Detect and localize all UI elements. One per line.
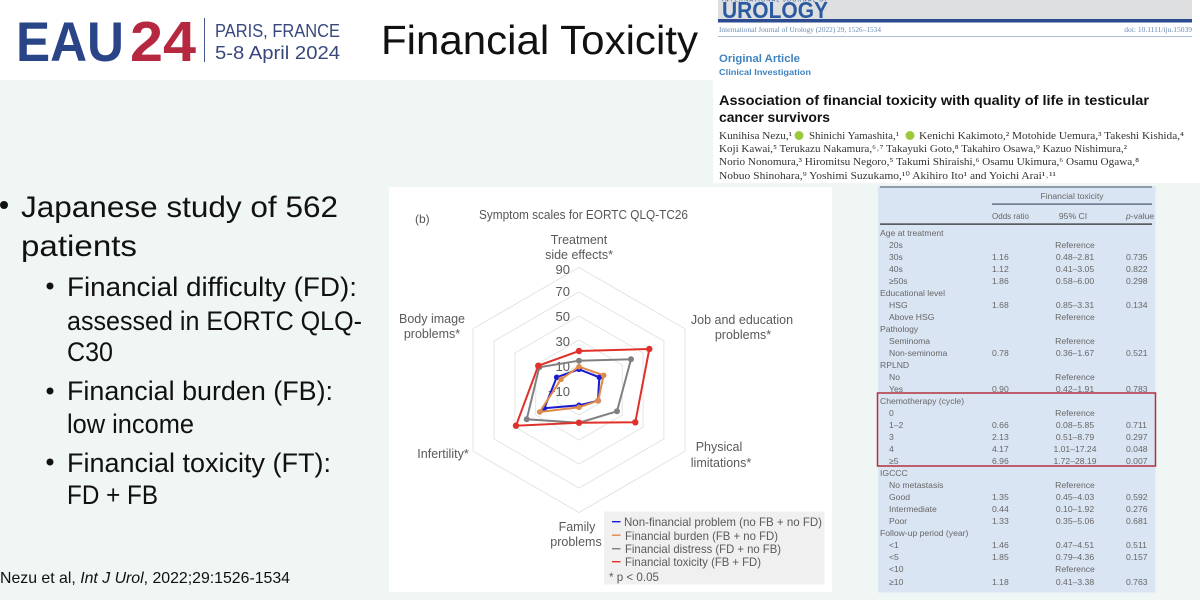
table rows: chemotherapy: 6.96 [992, 456, 1009, 466]
table rows: chemotherapy: 1.01–17.24 [1053, 444, 1097, 454]
series: non-financial problem [542, 366, 602, 411]
table rows: RPLND: 0.42–1.91 [1056, 384, 1094, 394]
table rows: IGCCC: 0.35–5.06 [1056, 516, 1094, 526]
table rows: IGCCC: Reference [1055, 480, 1095, 490]
radar axis labels: Treatment [551, 233, 608, 247]
table rows: chemotherapy: 1–2 [889, 420, 904, 430]
radar grid [473, 268, 685, 512]
table rows: follow-up period: Reference [1055, 564, 1095, 574]
bullet: financial burden [46, 376, 333, 439]
citation: Nezu et al, Int J Urol, 2022;29:1526-1534 [0, 570, 290, 587]
panel: journal article header: Original Article [719, 53, 800, 65]
panel: journal article header: Clinical Investigation [719, 67, 811, 77]
table rows: age at treatment: 0.58–6.00 [1056, 276, 1094, 286]
EAU24 logo: 24 [130, 10, 196, 74]
table rows: age at treatment: 0.41–3.05 [1056, 264, 1094, 274]
table rows: educational level: 0.85–3.31 [1056, 300, 1094, 310]
table header: 95% CI [1059, 211, 1087, 221]
panel: journal article header: cancer survivors [719, 110, 830, 125]
table rows: age at treatment: 1.86 [992, 276, 1009, 286]
table rows: IGCCC: 0.276 [1126, 504, 1148, 514]
table rows: follow-up period: 0.763 [1126, 577, 1148, 587]
table rows: IGCCC [880, 468, 1148, 526]
table header [992, 191, 1154, 221]
panel: journal article header: Norio Nonomura,³ Hiromitsu Negoro,⁵ Takumi Shiraishi,⁶ Osamu Ukimura,⁶ Osamu Ogawa,⁸ [719, 157, 1139, 168]
table rows: IGCCC: 1.35 [992, 492, 1009, 502]
table rows: age at treatment [880, 228, 1148, 286]
panel: journal article header: Koji Kawai,⁵ Terukazu Nakamura,⁶˒⁷ Takayuki Goto,⁸ Takahiro Osawa,⁹ Kazuo Nishimura,² [719, 144, 1127, 155]
table rows: age at treatment: Age at treatment [880, 228, 944, 238]
radar axis labels: Infertility* [417, 447, 469, 461]
table rows: follow-up period: 1.18 [992, 577, 1009, 587]
series: financial burden [537, 364, 606, 415]
table rows: IGCCC: 0.592 [1126, 492, 1148, 502]
radar scale numbers: 50 [556, 309, 570, 324]
table rows: RPLND: Yes [889, 384, 903, 394]
table rows: follow-up period: 0.511 [1126, 540, 1147, 550]
table rows: pathology: Non-seminoma [889, 348, 947, 358]
panel: journal article header: Kenichi Kakimoto,² Motohide Uemura,³ Takeshi Kishida,⁴ [919, 131, 1184, 142]
table rows: chemotherapy: 0.711 [1126, 420, 1147, 430]
radar axis labels: side effects* [545, 248, 613, 262]
table rows: age at treatment: 0.298 [1126, 276, 1148, 286]
bullet: study size [0, 191, 338, 263]
bullet: financial difficulty [46, 272, 362, 367]
table rows: age at treatment: 30s [889, 252, 903, 262]
table rows: chemotherapy: 0.51–8.79 [1056, 432, 1094, 442]
table rows: chemotherapy: 1.72–28.19 [1053, 456, 1097, 466]
table rows: IGCCC: 0.681 [1126, 516, 1148, 526]
radar scale numbers: 30 [556, 334, 570, 349]
panel: journal article header: Kunihisa Nezu,¹ [719, 131, 792, 142]
table rows: IGCCC: No metastasis [889, 480, 943, 490]
radar scale numbers: 10 [556, 359, 570, 374]
bullet list [0, 191, 362, 510]
table rows: follow-up period: 0.41–3.38 [1056, 577, 1094, 587]
panel: journal article header: Association of financial toxicity with quality of life in testicular [719, 93, 1150, 108]
table rows: pathology: Reference [1055, 336, 1095, 346]
bullet: financial toxicity: Financial toxicity (FT): [67, 448, 331, 478]
table rows: IGCCC: 1.33 [992, 516, 1009, 526]
radar axis labels: Family [559, 520, 596, 534]
radar axis labels: limitations* [691, 456, 751, 470]
table rows: pathology: 0.521 [1126, 348, 1148, 358]
bullet: financial difficulty: C30 [67, 337, 113, 367]
bullet: financial difficulty: assessed in EORTC QLQ- [67, 306, 362, 336]
radar scale numbers: 70 [556, 284, 570, 299]
panel: radar chart [389, 187, 832, 592]
table rows: follow-up period: Follow-up period (year) [880, 528, 968, 538]
radar axis labels: Job and education [691, 313, 793, 327]
table rows: follow-up period [880, 528, 1148, 587]
bullet: study size: patients [21, 230, 137, 263]
table rows: educational level: 0.134 [1126, 300, 1148, 310]
table rows: pathology: Seminoma [889, 336, 930, 346]
table rows: follow-up period: 0.157 [1126, 552, 1148, 562]
table rows: chemotherapy: 0.007 [1126, 456, 1148, 466]
table rows: age at treatment: Reference [1055, 240, 1095, 250]
radar scale numbers: −10 [548, 384, 570, 399]
table header: Odds ratio [992, 211, 1029, 221]
table rows: pathology: 0.36–1.67 [1056, 348, 1094, 358]
table rows: age at treatment: 0.822 [1126, 264, 1148, 274]
radar axis labels: problems [550, 535, 602, 549]
table rows: pathology: 0.78 [992, 348, 1009, 358]
table rows: chemotherapy: 0 [889, 408, 894, 418]
table rows: educational level: HSG [889, 300, 908, 310]
series: financial distress [524, 356, 634, 423]
EAU24 logo [16, 10, 340, 74]
radar axis labels [399, 233, 793, 549]
table rows: age at treatment: 40s [889, 264, 903, 274]
legend: Financial burden (FB + no FD) [625, 529, 778, 543]
table rows: IGCCC: Intermediate [889, 504, 937, 514]
table rows: IGCCC: Poor [889, 516, 907, 526]
panel: odds ratio table [878, 186, 1156, 592]
header band [0, 0, 713, 80]
panel: journal article header: doi: 10.1111/iju.15039 [1124, 25, 1192, 34]
table rows: educational level: Educational level [880, 288, 945, 298]
table header: p-value [1125, 211, 1154, 221]
table rows: RPLND: Reference [1055, 372, 1095, 382]
callout: chemotherapy highlight box [878, 393, 1156, 466]
table rows: follow-up period: 0.47–4.51 [1056, 540, 1094, 550]
table rows: age at treatment: 0.735 [1126, 252, 1148, 262]
table rows: educational level: 1.68 [992, 300, 1009, 310]
table rows: chemotherapy: 0.66 [992, 420, 1009, 430]
table rows: chemotherapy: 0.297 [1126, 432, 1148, 442]
radar scale numbers: 90 [556, 262, 570, 277]
bullet: financial difficulty: Financial difficulty (FD): [67, 272, 357, 302]
bullet: financial burden: low income [67, 409, 194, 439]
legend [604, 512, 824, 584]
table rows: follow-up period: <5 [889, 552, 899, 562]
table rows: chemotherapy: 2.13 [992, 432, 1009, 442]
radar scale numbers [548, 262, 570, 399]
panel: radar chart: (b) [415, 212, 430, 226]
table rows: RPLND [880, 360, 1148, 394]
table rows: IGCCC: IGCCC [880, 468, 908, 478]
table rows: RPLND: 0.783 [1126, 384, 1148, 394]
legend: Non-financial problem (no FB + no FD) [624, 515, 822, 529]
table rows: chemotherapy: Chemotherapy (cycle) [880, 396, 964, 406]
table rows: chemotherapy: 4.17 [992, 444, 1009, 454]
table rows: RPLND: RPLND [880, 360, 909, 370]
table rows: chemotherapy: 0.08–5.85 [1056, 420, 1094, 430]
table rows: IGCCC: 0.45–4.03 [1056, 492, 1094, 502]
EAU24 logo: EAU [16, 10, 124, 73]
table rows: age at treatment: 20s [889, 240, 903, 250]
table rows: chemotherapy: 0.048 [1126, 444, 1148, 454]
table rows: age at treatment: 1.12 [992, 264, 1009, 274]
table rows: follow-up period: <1 [889, 540, 899, 550]
title: Financial Toxicity [381, 17, 698, 63]
table rows: IGCCC: Good [889, 492, 910, 502]
bullet: financial burden: Financial burden (FB): [67, 376, 333, 406]
panel: journal article header: Nobuo Shinohara,⁹ Yoshimi Suzukamo,¹⁰ Akihiro Ito¹ and Yoichi Arai¹˒¹¹ [719, 170, 1056, 182]
table rows: age at treatment: 0.48–2.81 [1056, 252, 1094, 262]
panel: journal article header: International Journal of Urology (2022) 29, 1526–1534 [719, 25, 881, 34]
table rows: follow-up period: 1.85 [992, 552, 1009, 562]
table rows: chemotherapy [880, 396, 1148, 466]
table header: Financial toxicity [1040, 191, 1104, 201]
table rows: chemotherapy: Reference [1055, 408, 1095, 418]
legend: Financial toxicity (FB + FD) [625, 555, 761, 569]
panel: journal article header [713, 0, 1200, 183]
legend: * p < 0.05 [609, 570, 659, 584]
chart title: Symptom scales for EORTC QLQ-TC26 [479, 208, 688, 222]
radar axis labels: Body image [399, 312, 465, 326]
EAU24 logo: PARIS, FRANCE [215, 20, 340, 41]
legend: Financial distress (FD + no FB) [625, 542, 781, 556]
table rows: IGCCC: 0.10–1.92 [1056, 504, 1094, 514]
panel: journal article header: Shinichi Yamashita,¹ [809, 131, 899, 142]
table rows: educational level: Above HSG [889, 312, 935, 322]
table rows: IGCCC: 0.44 [992, 504, 1009, 514]
series: financial toxicity [513, 346, 652, 429]
bullet: study size: Japanese study of 562 [21, 191, 338, 224]
table rows: educational level: Reference [1055, 312, 1095, 322]
EAU24 logo: 5-8 April 2024 [215, 42, 340, 63]
table rows: pathology [880, 324, 1148, 358]
table rows: follow-up period: 1.46 [992, 540, 1009, 550]
table rows: age at treatment: ≥50s [889, 276, 908, 286]
radar axis labels: problems* [715, 328, 771, 342]
bullet: financial toxicity [46, 448, 331, 510]
table rows: follow-up period: <10 [889, 564, 904, 574]
bullet: financial toxicity: FD + FB [67, 480, 158, 510]
table rows: chemotherapy: 4 [889, 444, 894, 454]
table rows: chemotherapy: 3 [889, 432, 894, 442]
table rows: follow-up period: 0.79–4.36 [1056, 552, 1094, 562]
table rows: educational level [880, 288, 1148, 322]
table rows: chemotherapy: ≥5 [889, 456, 899, 466]
table rows: age at treatment: 1.16 [992, 252, 1009, 262]
radar axis labels: Physical [696, 440, 742, 454]
table rows: follow-up period: ≥10 [889, 577, 903, 587]
table rows: RPLND: 0.90 [992, 384, 1009, 394]
radar axis labels: problems* [404, 327, 460, 341]
table rows: RPLND: No [889, 372, 900, 382]
table rows: pathology: Pathology [880, 324, 919, 334]
